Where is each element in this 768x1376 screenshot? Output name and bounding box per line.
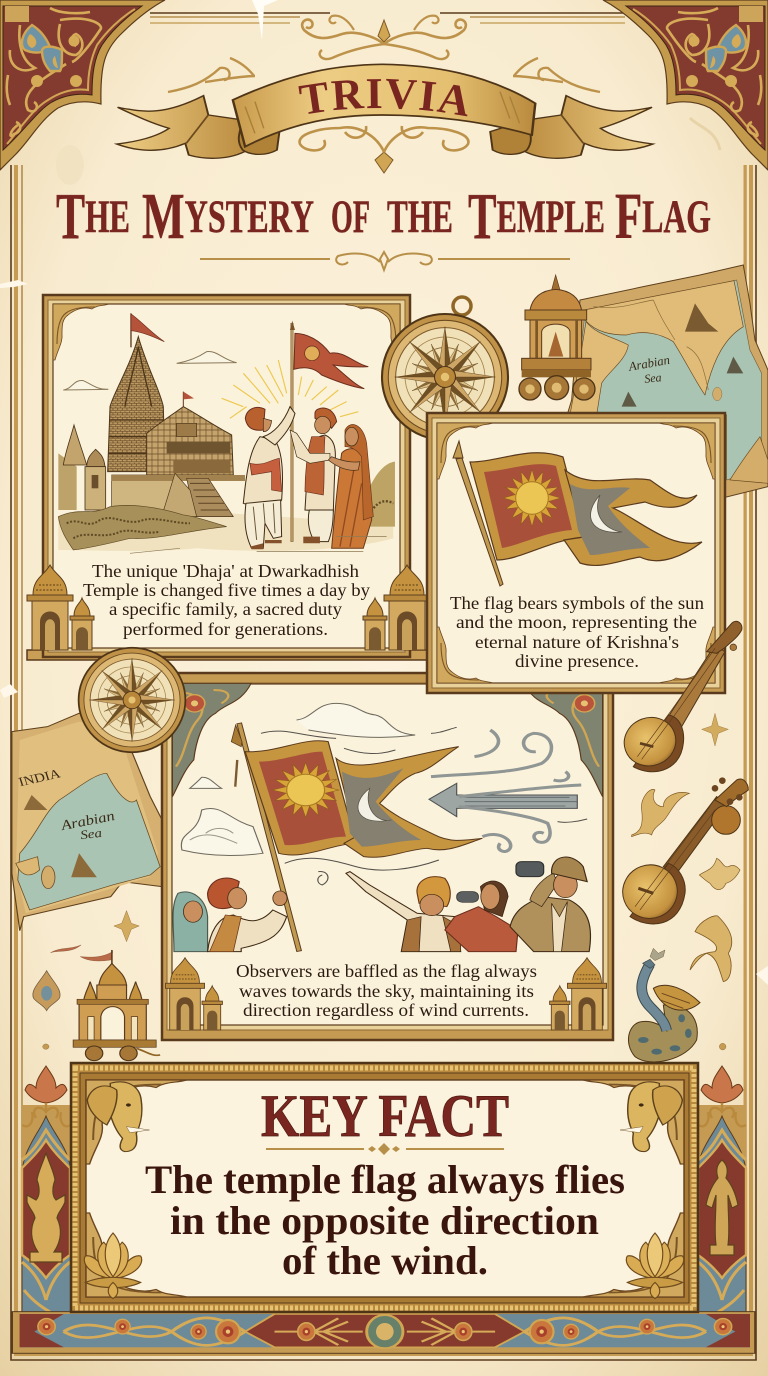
- caption: observers: direction regardless of wind currents.: [243, 1000, 529, 1020]
- caption: the flag ritual: a specific family, a sacred duty: [109, 599, 342, 619]
- side column: left: [22, 1066, 71, 1312]
- caption: the flag ritual: [83, 561, 370, 639]
- compass: left: [79, 648, 185, 752]
- temple spire ornaments at panel base: [165, 958, 607, 1030]
- caption: observers: Observers are baffled as the flag always: [236, 961, 537, 981]
- caption: sun and moon: [450, 593, 704, 671]
- key fact divider: [266, 1143, 504, 1155]
- veena: lower: [615, 777, 748, 926]
- title: M: [142, 180, 185, 253]
- paper stains and tears: [0, 0, 768, 985]
- caption: sun and moon: The flag bears symbols of the sun: [450, 593, 704, 613]
- icon: lotus flowers: [84, 1233, 684, 1299]
- map: top right: [567, 265, 768, 497]
- caption: sun and moon: and the moon, representing the: [456, 612, 697, 632]
- caption: the flag ritual: Temple is changed five times a day by: [83, 580, 370, 600]
- peacock: [628, 948, 700, 1062]
- decorative motifs: left margin: [33, 911, 139, 1049]
- veena: upper: [617, 621, 742, 773]
- map: left: INDIA: [17, 767, 62, 790]
- panel: flag changing ritual: [27, 295, 430, 660]
- title divider flourish: [200, 252, 570, 270]
- arch spandrels and illustration: [172, 683, 603, 952]
- corner ornament: top left: [0, 0, 165, 170]
- side column: right: [697, 1066, 746, 1312]
- panel frame: [162, 673, 613, 1040]
- illustration: flag with sun and crescent moon: [453, 441, 702, 586]
- title: T: [56, 180, 85, 253]
- panel base ledge: [27, 650, 427, 660]
- banner: trivia ribbon with heading: [114, 14, 656, 174]
- illustration: temple and family raising the flag: [58, 313, 395, 553]
- title: T: [468, 180, 497, 253]
- map: top right: Arabian: [627, 353, 671, 374]
- title: [56, 180, 711, 253]
- chariot shrine: top: [519, 275, 595, 400]
- caption: observers: waves towards the sky, maintaining its: [239, 981, 534, 1001]
- bottom decorative band: [12, 1312, 755, 1353]
- map: left: [12, 713, 162, 931]
- map: left: Arabian: [58, 808, 117, 834]
- frame: [71, 1063, 698, 1312]
- title: OF: [331, 191, 370, 243]
- corner ornament: top right: [603, 0, 768, 170]
- title: LAG: [642, 191, 711, 243]
- panel frame: [43, 295, 410, 657]
- icon: elephant heads: [87, 1082, 682, 1152]
- banner flourishes: [168, 16, 600, 173]
- title: THE: [387, 191, 453, 243]
- compass: top: [382, 297, 508, 440]
- panel: key fact: [71, 1063, 698, 1312]
- panel frame: [427, 413, 725, 693]
- key fact statement: in the opposite direction: [170, 1198, 599, 1243]
- map: top right: Sea: [644, 370, 662, 386]
- caption: sun and moon: divine presence.: [515, 651, 639, 671]
- caption: the flag ritual: performed for generations.: [123, 619, 328, 639]
- title: YSTERY: [185, 191, 314, 243]
- title: F: [615, 180, 642, 253]
- panel: sun and moon symbols: [427, 413, 725, 693]
- caption: sun and moon: eternal nature of Krishna's: [475, 632, 679, 652]
- chariot shrine: lower left: [73, 950, 160, 1061]
- banner: trivia ribbon with heading: TRIVIA: [298, 78, 468, 116]
- temple spire ornaments at panel base: [27, 565, 430, 650]
- decorative motifs: right margin: [632, 713, 740, 1050]
- title: EMPLE: [497, 191, 605, 243]
- key fact statement: [145, 1157, 625, 1283]
- panel: observers baffled by the flag: [162, 673, 613, 1040]
- title: HE: [85, 191, 130, 243]
- caption: the flag ritual: The unique 'Dhaja' at Dwarkadhish: [92, 561, 359, 581]
- caption: observers: [236, 961, 537, 1020]
- key fact statement: of the wind.: [282, 1238, 488, 1283]
- map: left: Sea: [79, 827, 103, 843]
- key fact statement: The temple flag always flies: [145, 1157, 625, 1202]
- heading: key fact: KEY FACT: [261, 1083, 509, 1149]
